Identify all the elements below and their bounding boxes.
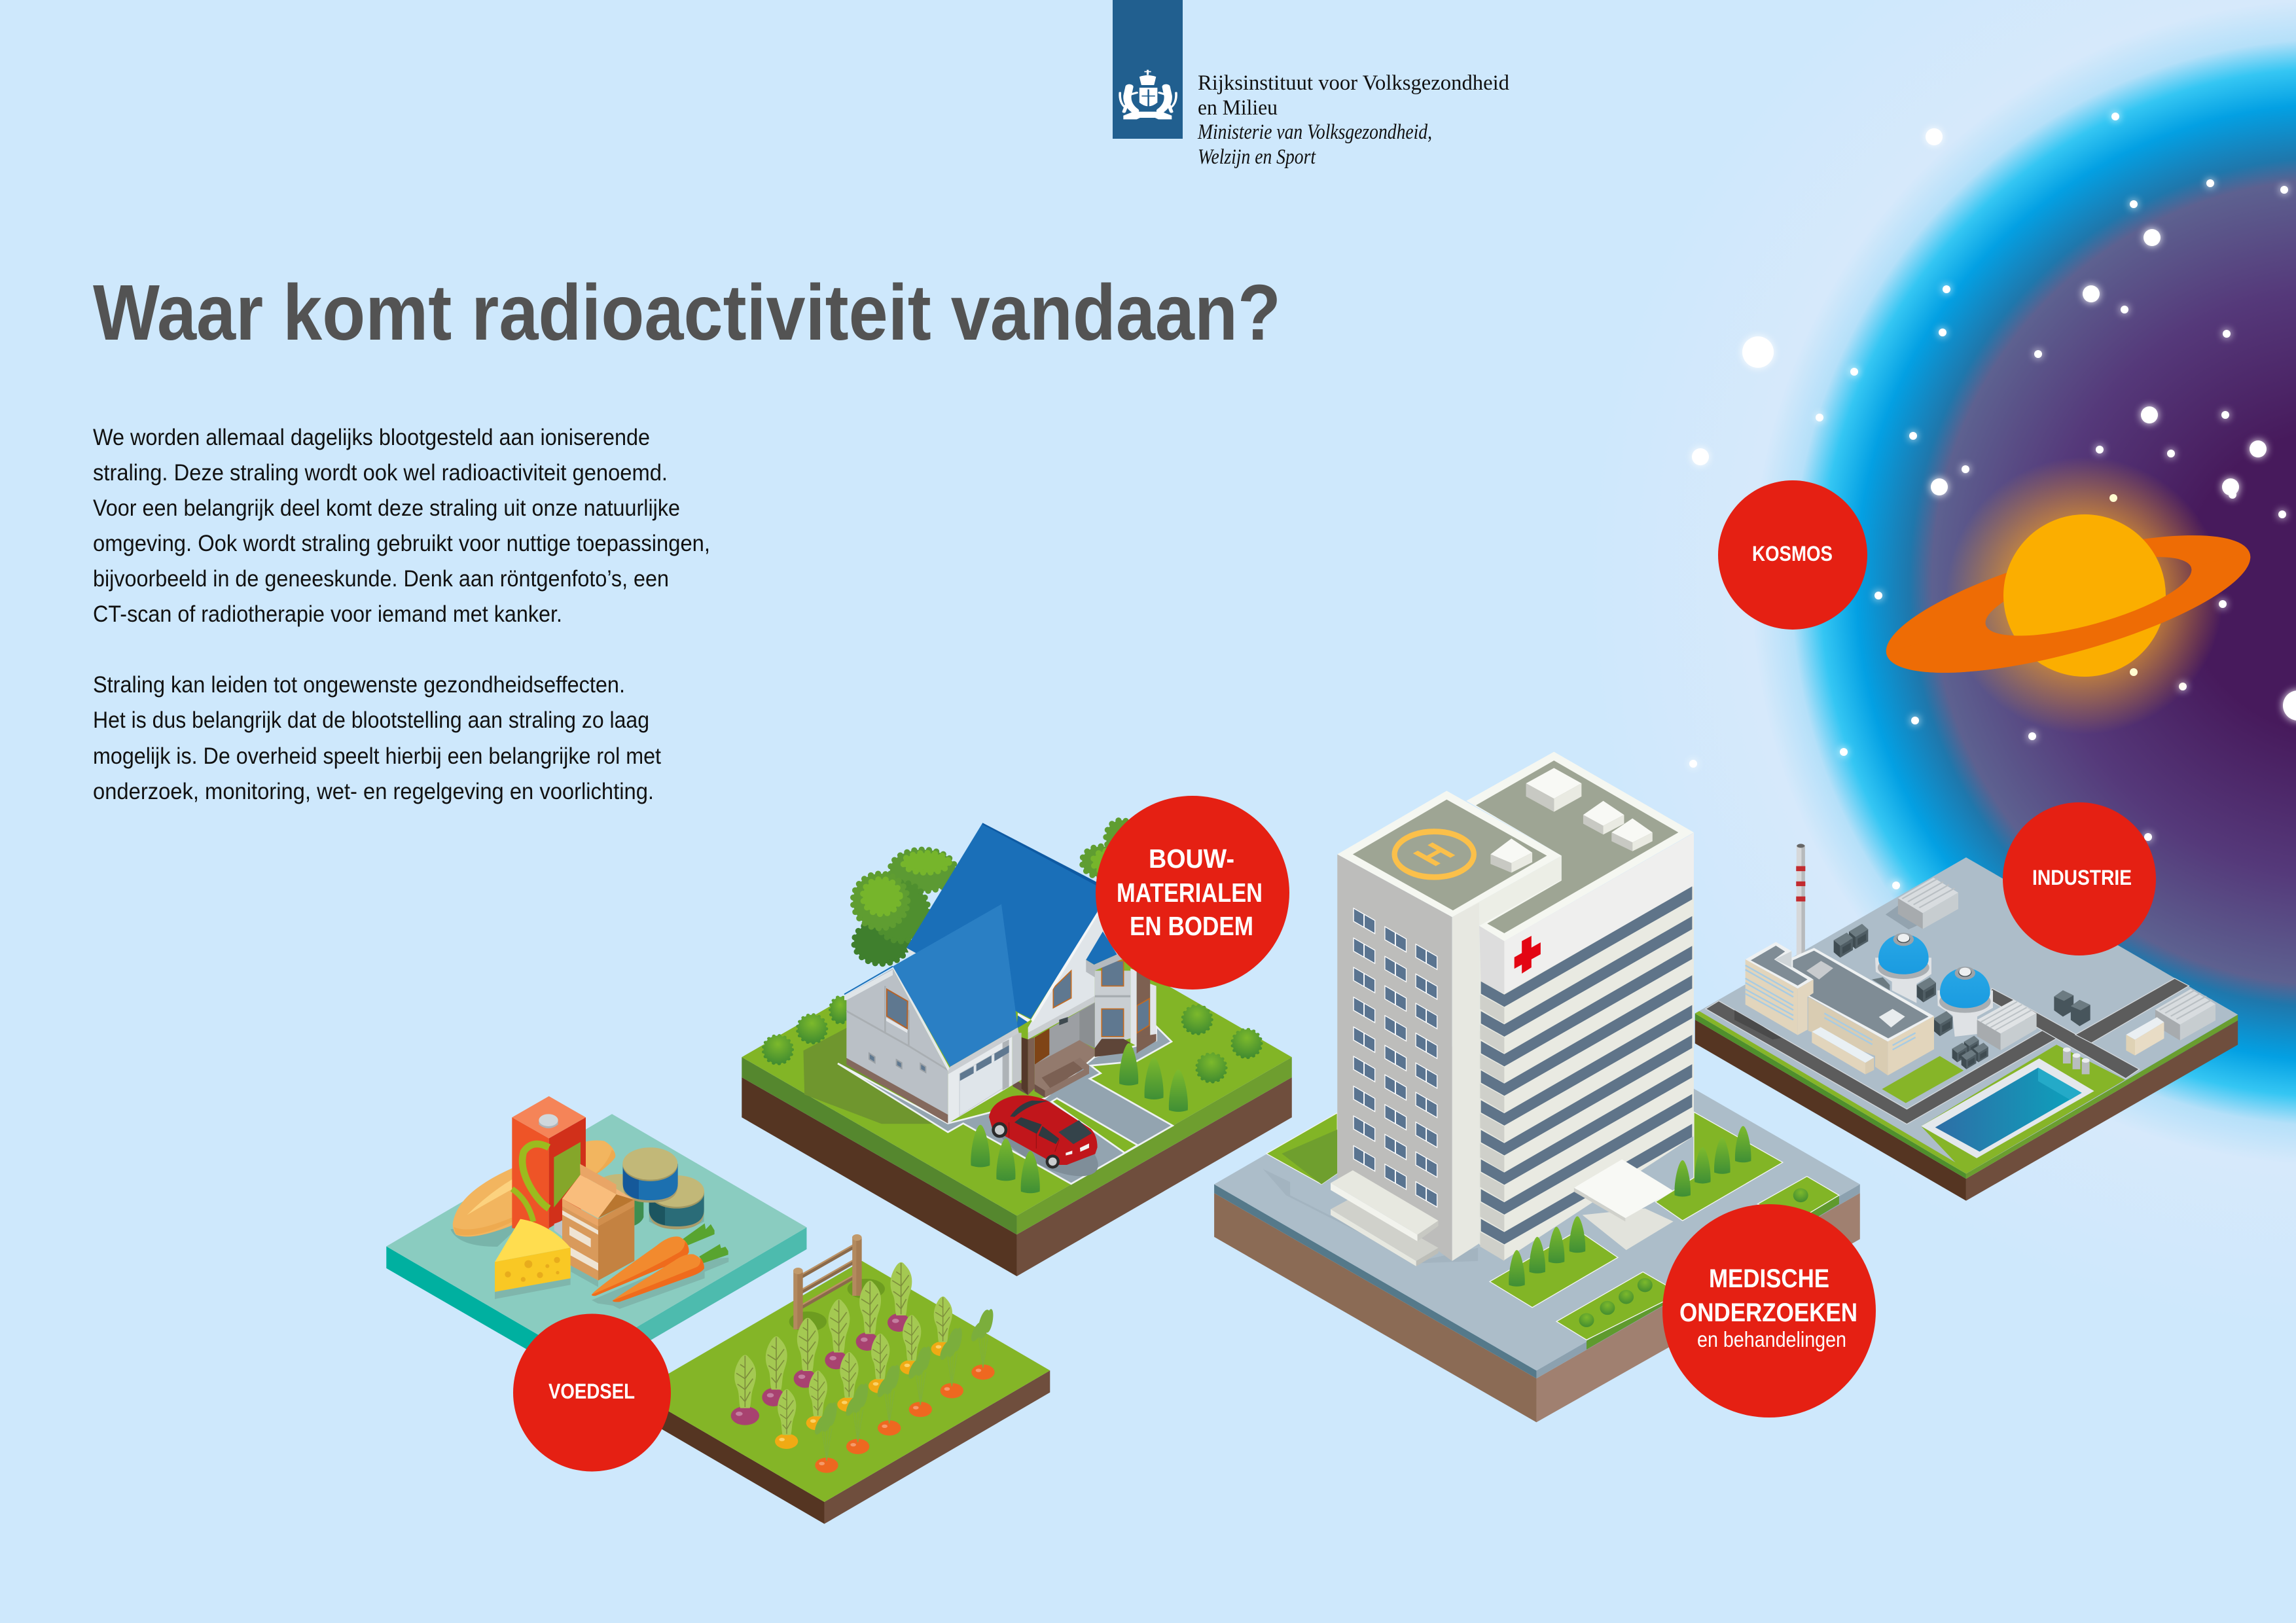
food items [450,1096,728,1309]
planet glow [1946,457,2223,734]
car [982,1094,1108,1190]
road shadow [1734,1010,1782,1039]
institute name: Welzijn en Sport [1198,145,1316,169]
reactor dome 2 [1933,967,1993,1037]
space gradient [1582,0,2296,1335]
far transformers [2054,990,2090,1026]
intro text block: straling. Deze straling wordt ook wel radioactiviteit genoemd. [93,460,668,486]
intro text block [93,425,710,804]
intro text block: We worden allemaal dagelijks blootgesteld aan ioniserende [93,425,650,450]
intro text block: omgeving. Ook wordt straling gebruikt voor nuttige toepassingen, [93,531,710,556]
pool area [1921,1044,2125,1173]
label: bouwmaterialen en bodem: BOUW- [1149,844,1234,874]
left gable wall [844,967,950,1124]
main roof [906,823,1098,1029]
intro text block: Straling kan leiden tot ongewenste gezondheidseffecten. [93,672,625,698]
label: industrie: INDUSTRIE [2032,866,2132,889]
planet: ringed Saturn [1886,514,2250,677]
roads [1706,978,2189,1124]
site ground, roads and pool [1695,844,2238,1201]
back bushes [764,997,1261,1082]
roof with helipad [1337,752,1694,941]
institute name [1197,71,1509,169]
panel: food platter [386,1096,806,1381]
house detail [838,820,1173,1190]
cheese [495,1219,571,1299]
label: voedsel: VOEDSEL [548,1380,635,1403]
crops: beets [731,1262,912,1425]
concrete tile [1214,998,1860,1422]
carrots [592,1223,728,1309]
bread [450,1140,615,1247]
field tile [636,1261,1050,1524]
hospital trees [1509,1126,1808,1327]
institute name: en Milieu [1198,96,1278,120]
institute name: Ministerie van Volksgezondheid, [1197,120,1432,144]
intro text block: bijvoorbeeld in de geneeskunde. Denk aan röntgenfoto’s, een [93,566,669,592]
intro text block: Voor een belangrijk deel komt deze straling uit onze natuurlijke [93,495,680,521]
label: medische onderzoeken [1662,1204,1876,1418]
institute name: Rijksinstituut voor Volksgezondheid [1198,71,1509,95]
chimney [1796,844,1805,955]
pale stars [2109,494,2138,676]
driveway and paths [838,1026,1173,1184]
label: bouwmaterialen en bodem: MATERIALEN [1117,878,1263,908]
intro text block: Het is dus belangrijk dat de blootstelling aan straling zo laag [93,707,649,733]
intro text block: CT-scan of radiotherapie voor iemand met kanker. [93,601,562,627]
trees behind house [853,820,1137,964]
eave of garage [948,1027,1019,1075]
field content [731,1234,995,1473]
tile [1695,857,2238,1201]
crops: carrots [812,1308,995,1473]
office block [1746,942,1814,1035]
label: industrie [2003,802,2156,955]
panel: industry with reactors [1695,844,2238,1201]
fence [789,1234,885,1332]
front gable roof [893,904,1018,1067]
label: medische onderzoeken: MEDISCHE [1709,1264,1829,1293]
reactor complex [1734,924,2037,1075]
panel: house on soil tile [742,820,1292,1276]
helipad marking: H [1405,838,1465,872]
milk carton [562,1164,634,1287]
label: medische onderzoeken: en behandelingen [1697,1327,1846,1351]
teal plate [386,1114,806,1381]
tower corner [1452,902,1479,1261]
cans [596,1147,704,1229]
transformer cluster [1952,1036,1988,1069]
reactor dome 1 [1872,933,1936,1003]
logo: Rijksoverheid [1113,0,1509,169]
transformers behind domes [1834,924,1868,957]
cosmos backdrop with stars and planet [1686,20,2296,1145]
label: kosmos [1718,480,1867,630]
tower left face [1337,854,1452,1261]
panel: hospital on tile [1214,752,1860,1422]
helipad marking [1395,832,1474,877]
garage [948,1033,1022,1124]
side roof [1086,931,1126,977]
panel: vegetable field [636,1234,1050,1524]
porch [1013,1003,1095,1097]
label: voedsel [513,1314,671,1471]
juice carton [512,1096,586,1237]
label: medische onderzoeken: ONDERZOEKEN [1679,1298,1857,1327]
crate units [1886,878,2215,1041]
beige storage box [2126,1017,2164,1056]
label: kosmos: KOSMOS [1752,542,1833,565]
lawn [1882,1056,1964,1103]
reactor hall [1791,948,1934,1075]
building shadow [1263,1169,1478,1263]
crate by dome [1977,1000,2037,1050]
label: bouwmaterialen en bodem: EN BODEM [1130,911,1253,941]
lawns [1266,1112,1839,1340]
roof units [1490,768,1653,873]
intro text block: mogelijk is. De overheid speelt hierbij een belangrijke rol met [93,743,661,769]
right wing [1095,961,1157,1057]
title: Waar komt radioactiviteit vandaan? [93,268,1281,357]
icon: red cross [1515,936,1541,974]
logo bar with crest [1113,0,1183,139]
soil and grass tile [742,899,1292,1276]
entrance canopies [1331,1159,1674,1266]
intro text block: onderzoek, monitoring, wet- en regelgeving en voorlichting. [93,779,654,804]
label: bouwmaterialen en bodem [1096,796,1289,990]
stars [1689,113,2296,889]
crops: yellow roots [775,1296,954,1449]
tower right face with floors [1479,833,1694,1261]
cypress trees [971,1043,1188,1193]
upper gable wall [1028,910,1104,1039]
